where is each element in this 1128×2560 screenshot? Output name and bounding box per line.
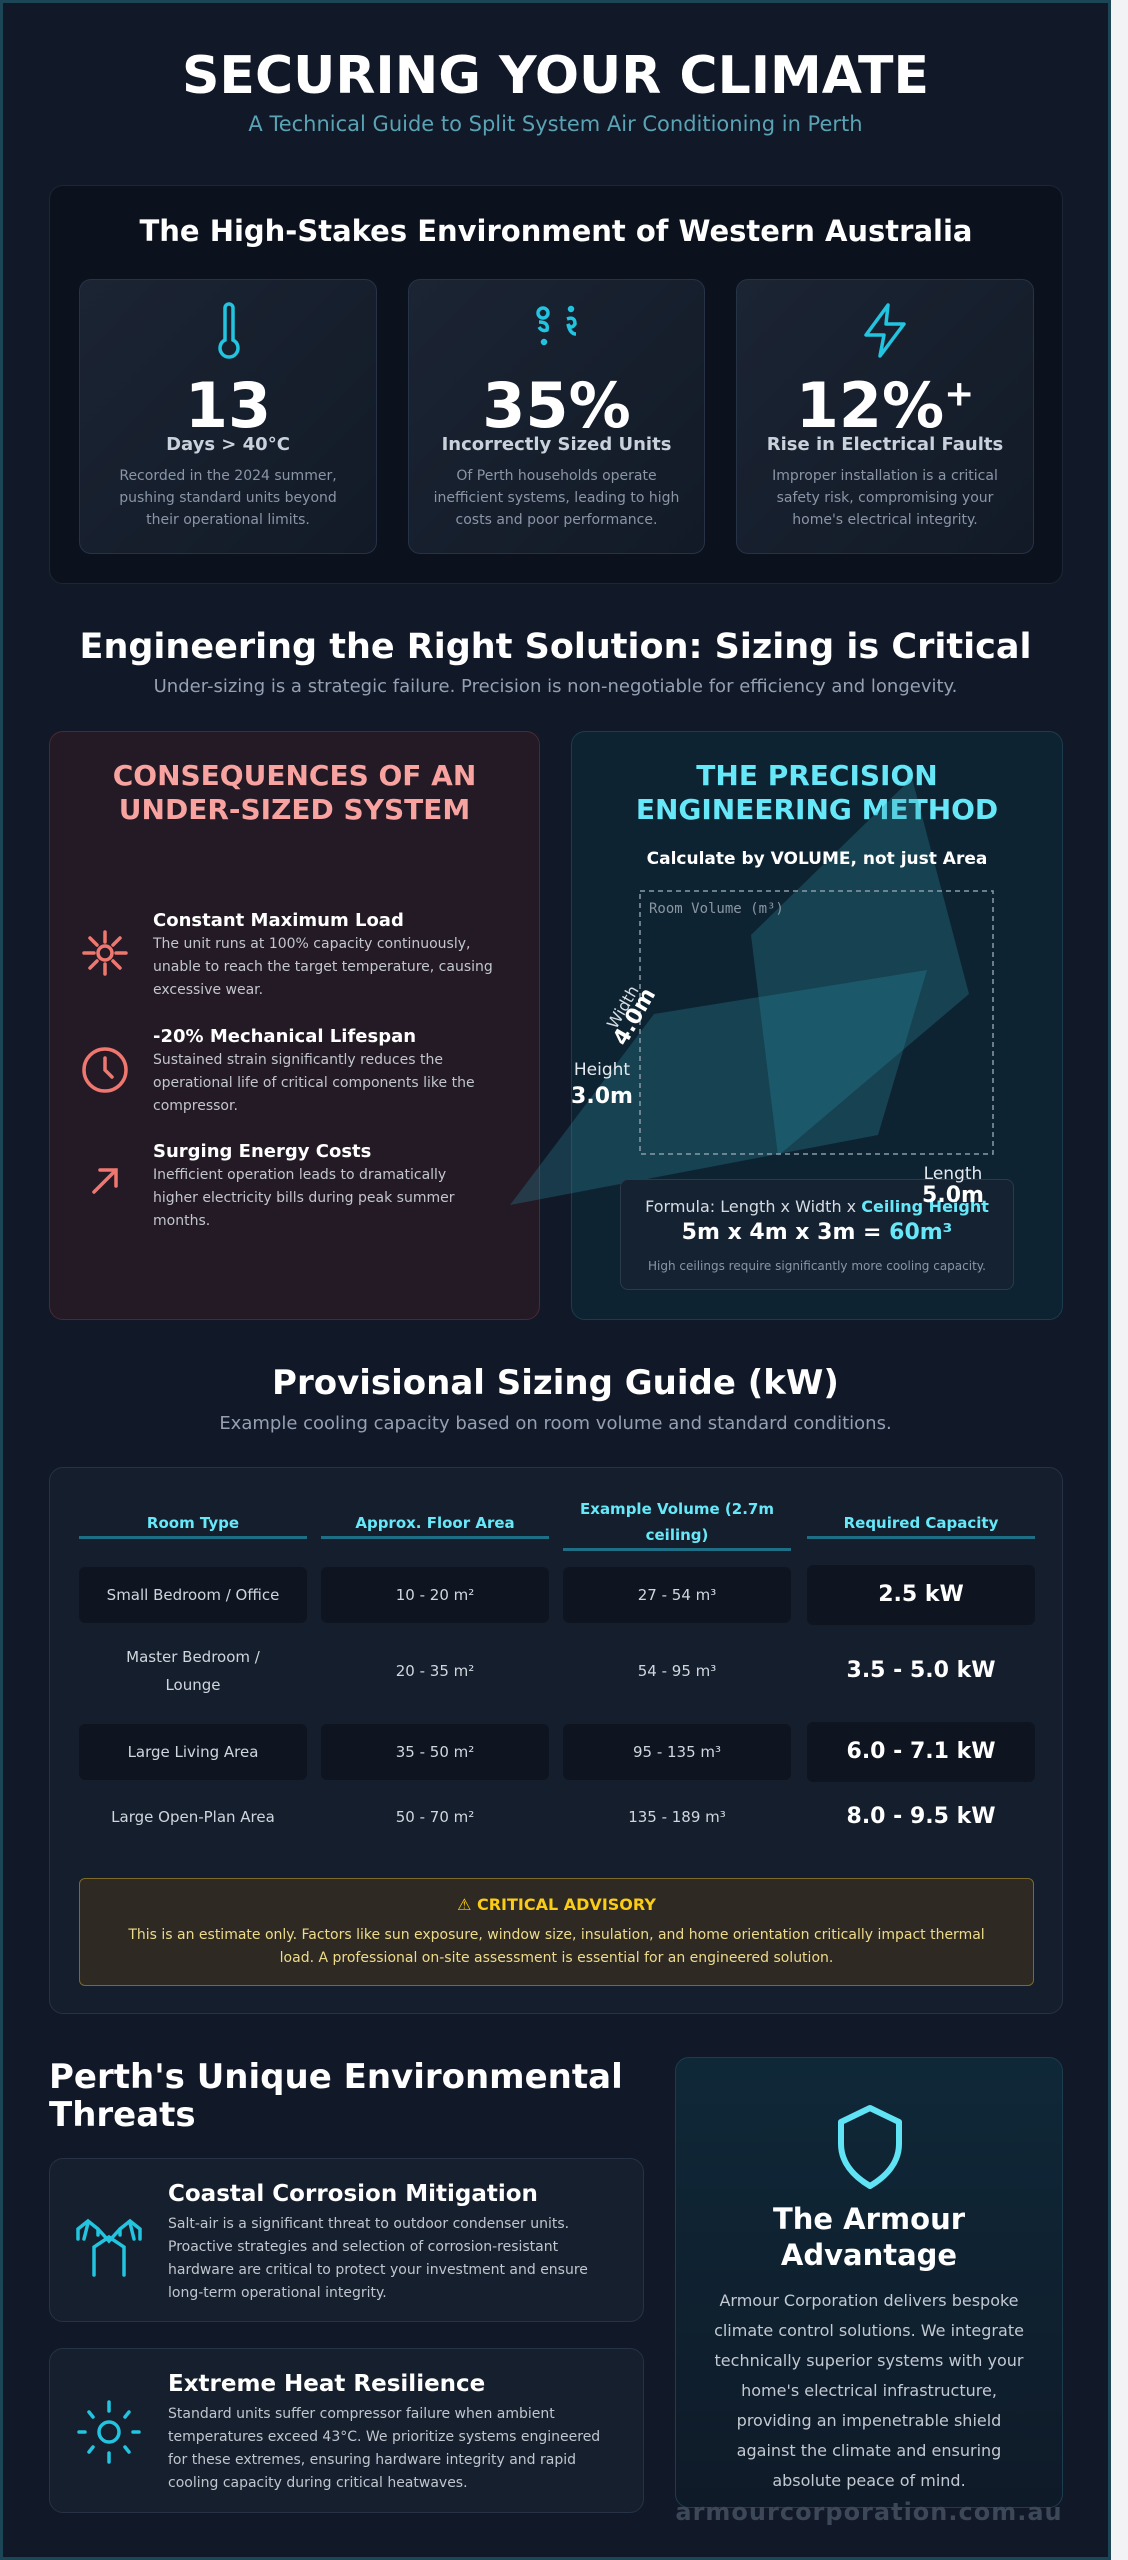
item: constant load: Constant Maximum Load xyxy=(153,910,404,931)
table rows: Small Bedroom / Office xyxy=(107,1586,279,1604)
panel heading: THE PRECISION xyxy=(696,759,938,792)
table rows: 27 - 54 m³ xyxy=(638,1586,716,1604)
card text: Salt-air is a significant threat to outdoor condenser units. Proactive strategies and selection of corrosion-resistant hardware are critical to protect your investment and ensure long-term operational integrity. xyxy=(168,2216,588,2301)
icon: corrosion xyxy=(76,2218,142,2277)
panel heading: UNDER-SIZED SYSTEM xyxy=(119,793,470,826)
table rows: 10 - 20 m² xyxy=(396,1586,474,1604)
panel heading xyxy=(113,759,476,826)
stat label: Incorrectly Sized Units xyxy=(442,434,671,455)
table header: Required Capacity xyxy=(844,1514,998,1532)
title: SECURING YOUR CLIMATE xyxy=(182,46,929,106)
diagram: room volume: 4.0m xyxy=(609,984,661,1050)
table rows xyxy=(79,1565,1035,1829)
stat description: Improper installation is a critical safety risk, compromising your home's electrical integrity. xyxy=(772,468,998,528)
table rows: Large Open-Plan Area xyxy=(111,1808,275,1826)
heading: The Armour xyxy=(773,2202,965,2236)
label: length: 5.0m xyxy=(922,1183,984,1208)
text: calc by volume: Calculate by VOLUME, not just Area xyxy=(647,849,987,869)
table rows: 135 - 189 m³ xyxy=(628,1808,726,1826)
panel heading: CONSEQUENCES OF AN xyxy=(113,759,476,792)
item: constant load: The unit runs at 100% capacity continuously, unable to reach the target temperature, causing excessive wear. xyxy=(153,936,493,998)
item: lifespan: -20% Mechanical Lifespan xyxy=(153,1026,416,1047)
table rows: Master Bedroom / xyxy=(126,1648,260,1666)
label: length xyxy=(922,1164,984,1208)
icon: thermometer xyxy=(218,302,240,359)
section subtitle: Example cooling capacity based on room volume and standard conditions. xyxy=(219,1413,892,1434)
advisory title: ⚠ CRITICAL ADVISORY xyxy=(457,1895,656,1914)
body text: Armour Corporation delivers bespoke climate control solutions. We integrate technically superior systems with your home's electrical infrastructure, providing an impenetrable shield against the climate and ensuring absolute peace of mind. xyxy=(714,2291,1024,2490)
panel: high-stakes environment xyxy=(49,185,1063,584)
item: energy costs: Inefficient operation leads to dramatically higher electricity bills during peak summer months. xyxy=(153,1167,454,1229)
panel heading: ENGINEERING METHOD xyxy=(636,793,998,826)
table rows: Lounge xyxy=(165,1676,221,1694)
subtitle: A Technical Guide to Split System Air Conditioning in Perth xyxy=(248,112,863,136)
diagram: room volume: Width xyxy=(603,982,643,1032)
table header: Approx. Floor Area xyxy=(355,1514,515,1532)
section heading: threats: Perth's Unique Environmental Threats xyxy=(49,2057,623,2135)
table rows: 95 - 135 m³ xyxy=(633,1743,721,1761)
section subtitle: Under-sizing is a strategic failure. Precision is non-negotiable for efficiency and longevity. xyxy=(154,676,957,697)
panel: consequences xyxy=(49,731,540,1320)
table rows: 6.0 - 7.1 kW xyxy=(847,1739,995,1764)
callout: critical advisory xyxy=(79,1878,1034,1986)
threat card: heat xyxy=(49,2348,644,2513)
label: length: Length xyxy=(924,1164,982,1184)
stat number: 12%+ xyxy=(796,369,974,442)
threat card: corrosion xyxy=(49,2158,644,2322)
note: High ceilings require significantly more cooling capacity. xyxy=(648,1259,986,1273)
stat card: electrical faults xyxy=(736,279,1034,554)
section heading: sizing guide: Provisional Sizing Guide (kW) xyxy=(272,1363,839,1403)
panel heading: The High-Stakes Environment of Western Australia xyxy=(140,214,972,248)
diagram: room volume: 3.0m xyxy=(571,1084,633,1109)
panel: precision method xyxy=(571,731,1063,1320)
stat card: heat days xyxy=(79,279,377,554)
table rows: 2.5 kW xyxy=(878,1582,964,1607)
diagram: room volume: Room Volume (m³) xyxy=(649,901,784,917)
panel: armour advantage xyxy=(675,2057,1063,2508)
formula result: 5m x 4m x 3m = 60m³ xyxy=(682,1220,952,1245)
item: lifespan: Sustained strain significantly reduces the operational life of critical components like the compressor. xyxy=(153,1052,475,1114)
table rows: Large Living Area xyxy=(128,1743,258,1761)
stat description: Recorded in the 2024 summer, pushing standard units beyond their operational limits. xyxy=(119,468,337,528)
stat number: 13 xyxy=(185,369,271,442)
diagram: room volume: Height xyxy=(574,1060,630,1080)
table panel xyxy=(49,1467,1063,2014)
table rows: 8.0 - 9.5 kW xyxy=(847,1804,995,1829)
formula box xyxy=(620,1179,1014,1290)
diagram: room volume xyxy=(510,778,994,1205)
formula text: Formula: Length x Width x Ceiling Height xyxy=(645,1197,989,1216)
table rows: 3.5 - 5.0 kW xyxy=(847,1658,995,1683)
stat label: Rise in Electrical Faults xyxy=(767,434,1003,455)
icon: sizing glyph xyxy=(536,306,577,346)
stat card: incorrect sizing xyxy=(408,279,705,554)
icon: lightning xyxy=(864,303,906,358)
panel heading xyxy=(636,759,998,826)
section heading: sizing: Engineering the Right Solution: Sizing is Critical xyxy=(80,627,1031,667)
stat number: 35% xyxy=(482,369,631,442)
footer url: armourcorporation.com.au xyxy=(675,2498,1063,2526)
icon: arrow up-right xyxy=(92,1168,118,1194)
item: energy costs: Surging Energy Costs xyxy=(153,1141,371,1162)
table header: Example Volume (2.7m xyxy=(580,1500,774,1518)
heading: Advantage xyxy=(781,2238,957,2272)
table rows: 35 - 50 m² xyxy=(396,1743,474,1761)
icon: clock xyxy=(82,1047,128,1093)
table rows: 54 - 95 m³ xyxy=(638,1662,716,1680)
table header: ceiling) xyxy=(646,1526,708,1544)
icon: shield xyxy=(838,2105,902,2189)
table rows: 20 - 35 m² xyxy=(396,1662,474,1680)
icon: load sun xyxy=(82,930,128,976)
table header xyxy=(79,1500,1035,1551)
advisory text: This is an estimate only. Factors like sun exposure, window size, insulation, and home orientation critically impact thermal load. A professional on-site assessment is essential for an engineered solution. xyxy=(128,1927,985,1966)
card text: Standard units suffer compressor failure when ambient temperatures exceed 43°C. We prioritize systems engineered for these extremes, ensuring hardware integrity and rapid cooling capacity during critical heatwaves. xyxy=(168,2406,600,2491)
table header: Room Type xyxy=(147,1514,239,1532)
stat label: Days > 40°C xyxy=(166,434,290,455)
card title: Extreme Heat Resilience xyxy=(168,2371,485,2397)
card title: Coastal Corrosion Mitigation xyxy=(168,2181,538,2207)
heading xyxy=(773,2202,965,2272)
table rows: 50 - 70 m² xyxy=(396,1808,474,1826)
stat description: Of Perth households operate inefficient systems, leading to high costs and poor performance. xyxy=(434,468,679,528)
icon: sun xyxy=(77,2400,141,2464)
